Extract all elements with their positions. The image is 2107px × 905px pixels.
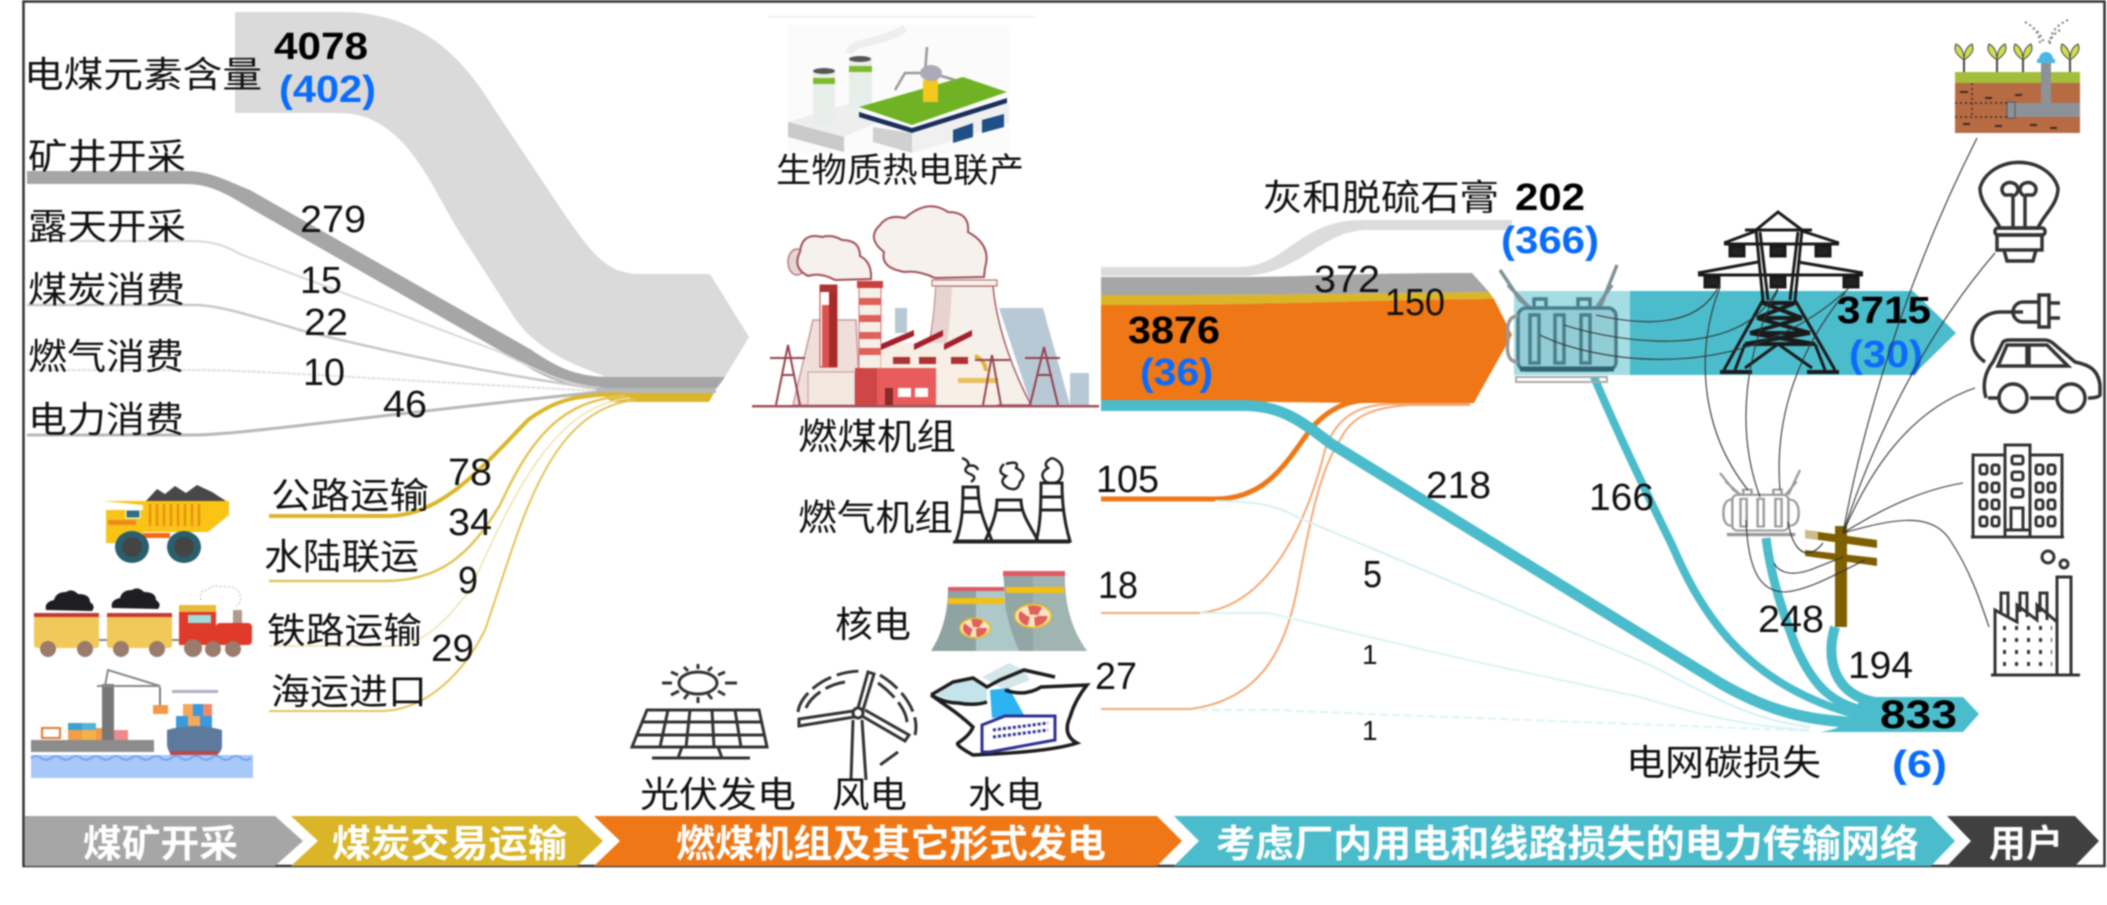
value 150: 150 — [1385, 282, 1445, 324]
value 46: 46 — [383, 384, 427, 426]
label: sea import: 海运进口 — [271, 671, 427, 712]
icon: biomass CHP plant — [768, 16, 1035, 153]
label: underground mining: 矿井开采 — [28, 136, 186, 177]
value 402: (402) — [279, 69, 376, 111]
flow: transport carbon band — [1101, 292, 1494, 305]
flow: medium voltage loss 248 — [1766, 538, 1870, 712]
flow: opencast mining — [27, 241, 600, 388]
panel: end users — [1955, 20, 2100, 675]
icon: nuclear plant — [931, 571, 1087, 651]
value 29: 29 — [431, 628, 474, 670]
flow: ash and gypsum — [1101, 220, 1512, 276]
label: grid carbon loss: 电网碳损失 — [1626, 742, 1821, 783]
value 248: 248 — [1758, 599, 1824, 641]
value 5: 5 — [1363, 554, 1382, 596]
flow: road transport — [269, 394, 620, 516]
panel: coal transport flows — [264, 393, 714, 712]
label: opencast mining: 露天开采 — [28, 206, 186, 247]
stage: coal units and other generation: 燃煤机组及其它形式发电 — [676, 824, 1106, 866]
flow: gas carbon loss — [1215, 501, 1810, 727]
label: road transport: 公路运输 — [271, 475, 429, 516]
flow: generation total — [1101, 299, 1512, 403]
icon: mining truck — [103, 485, 229, 563]
panel: generation — [632, 16, 1099, 815]
stage: coal units and other generation — [594, 816, 1182, 866]
transport total band — [600, 393, 714, 402]
value 22: 22 — [304, 302, 348, 344]
label: photovoltaic: 光伏发电 — [640, 774, 796, 815]
flow: nuclear carbon loss — [1200, 613, 1810, 730]
panel: coal mining flows — [24, 12, 749, 440]
stage: users: 用户 — [1989, 824, 2063, 866]
value 78: 78 — [448, 452, 492, 494]
icon: main transformer — [1500, 265, 1617, 382]
label: electricity consumption: 电力消费 — [28, 399, 184, 440]
value 6: (6) — [1892, 744, 1947, 786]
value 218: 218 — [1426, 465, 1491, 507]
value 30: (30) — [1849, 334, 1923, 376]
flow: transmission total arrow — [1630, 291, 1956, 375]
label: rail transport: 铁路运输 — [267, 610, 422, 651]
flow: water-land transport — [269, 396, 625, 581]
label: ash and gypsum: 灰和脱硫石膏 — [1263, 177, 1499, 218]
value 202: 202 — [1515, 177, 1585, 219]
value 9: 9 — [458, 560, 478, 602]
icon: commercial building — [1971, 445, 2064, 537]
icon: irrigation agriculture — [1955, 20, 2080, 133]
icon: transmission tower — [1698, 212, 1863, 372]
flow: gas consumption — [27, 370, 600, 391]
flow: sea import — [269, 400, 635, 711]
label: hydro: 水电 — [968, 774, 1043, 815]
flow: underground mining — [27, 171, 725, 388]
stage: coal mining: 煤矿开采 — [83, 824, 238, 866]
label: wind: 风电 — [832, 774, 907, 815]
value 18: 18 — [1098, 565, 1138, 607]
icon: port and ship — [31, 670, 253, 778]
value 15: 15 — [300, 260, 342, 302]
flow: transmission total arrow light part — [1514, 291, 1630, 375]
value 372: 372 — [1314, 259, 1380, 301]
value 34: 34 — [448, 502, 492, 544]
value 833: 833 — [1880, 693, 1957, 737]
flow: hydro power — [1101, 405, 1470, 709]
value 194: 194 — [1848, 645, 1913, 687]
label: coal consumption: 煤炭消费 — [28, 269, 185, 310]
label: biomass CHP: 生物质热电联产 — [776, 152, 1024, 190]
stage: users — [1947, 816, 2099, 866]
flow: coal consumption — [27, 305, 600, 389]
value 1 hydro: 1 — [1362, 715, 1378, 746]
flow: low voltage loss 194 — [1831, 627, 1875, 702]
stage: coal trading and transport — [291, 816, 603, 866]
stage: coal trading and transport: 煤炭交易运输 — [332, 824, 567, 866]
value 3715: 3715 — [1837, 290, 1931, 332]
mining total band — [596, 388, 716, 393]
value 166: 166 — [1589, 477, 1654, 519]
value 36: (36) — [1140, 352, 1213, 394]
label: gas consumption: 燃气消费 — [28, 336, 184, 377]
flow: high voltage loss 166 — [1594, 377, 1870, 718]
flow: mining carbon band — [1101, 273, 1489, 295]
icon: factory — [1991, 551, 2080, 675]
label: gas units: 燃气机组 — [798, 497, 953, 538]
value 4078: 4078 — [274, 26, 368, 68]
icon: secondary transformer — [1720, 470, 1800, 535]
process bar — [25, 816, 2099, 866]
value 10: 10 — [303, 352, 345, 394]
icon: coal power plant — [752, 206, 1099, 408]
flow: electricity consumption — [27, 392, 600, 435]
value 279: 279 — [300, 199, 366, 241]
label: coal element content: 电煤元素含量 — [24, 54, 262, 95]
icon: hydro dam — [931, 663, 1087, 755]
value 27: 27 — [1095, 656, 1137, 698]
panel: transmission flows — [1095, 138, 1995, 786]
icon: electric car — [1972, 295, 2100, 412]
value 105: 105 — [1096, 459, 1159, 501]
value 3876: 3876 — [1128, 310, 1220, 352]
icon: utility pole — [1805, 526, 1877, 627]
icon: wind turbine — [798, 671, 916, 780]
stage: coal mining — [25, 816, 303, 866]
flow: coal element content — [235, 12, 749, 377]
value 366: (366) — [1501, 220, 1599, 262]
stage: power transmission network: 考虑厂内用电和线路损失的电力传输网络 — [1216, 824, 1919, 866]
flow: grid loss total arrow — [1820, 697, 1979, 732]
label: water-land transport: 水陆联运 — [264, 536, 419, 577]
flow: plant to grid loss 218 — [1101, 406, 1870, 723]
icon: gas plant — [953, 458, 1070, 542]
flow: hydro carbon loss — [1200, 710, 1810, 731]
flow: gas power — [1101, 400, 1467, 499]
flow: rail transport — [269, 398, 630, 646]
icon: light bulb — [1980, 162, 2058, 261]
thin distribution wires — [1540, 138, 1995, 627]
icon: solar panel — [632, 664, 767, 758]
value 1 nuclear: 1 — [1362, 639, 1378, 670]
label: coal units: 燃煤机组 — [798, 416, 956, 457]
label: nuclear: 核电 — [835, 604, 911, 645]
flow: nuclear power — [1101, 404, 1470, 613]
icon: coal train — [34, 586, 252, 657]
